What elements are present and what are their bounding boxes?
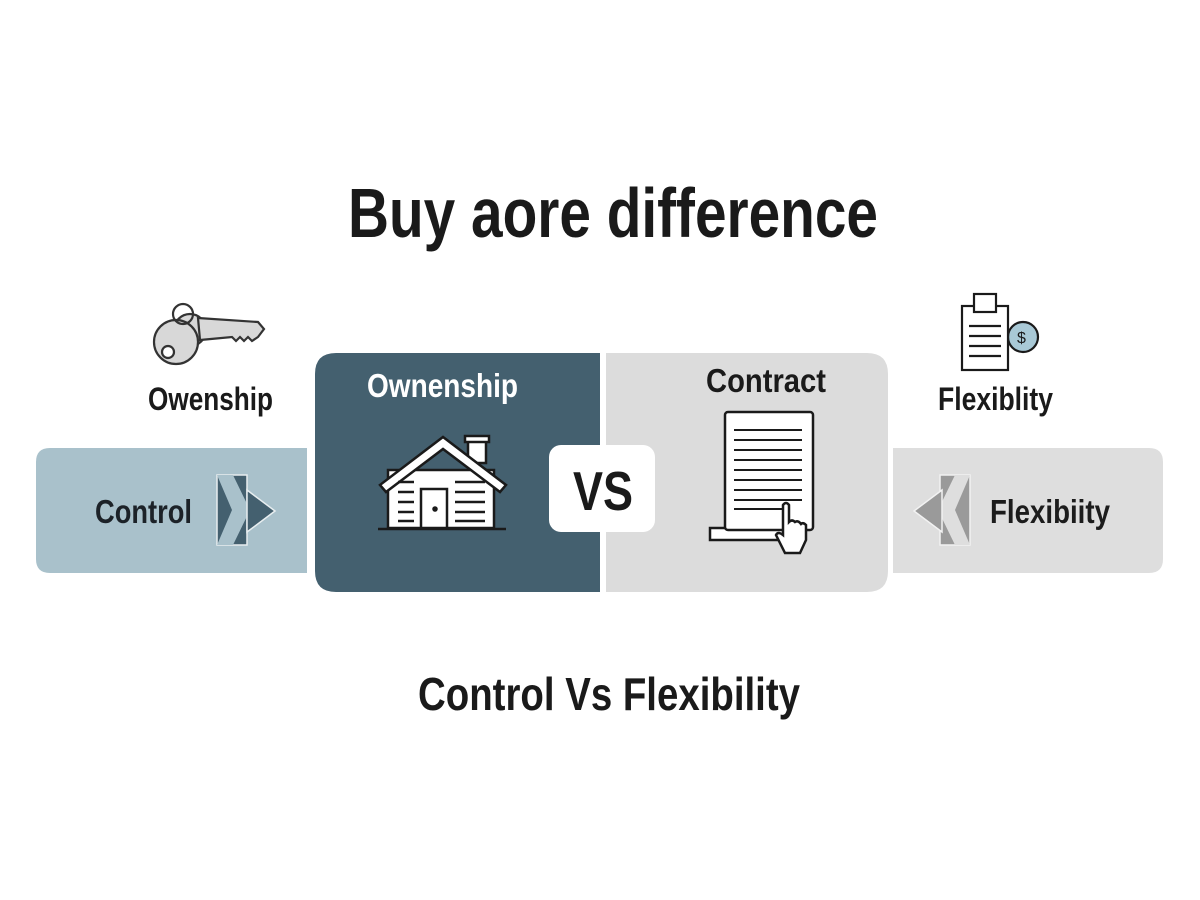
icon: house <box>378 436 506 529</box>
panel: contract (light) <box>606 353 888 592</box>
title: Buy aore difference <box>348 174 878 252</box>
text: Control: Control <box>95 493 192 530</box>
subtitle: Control Vs Flexibility <box>418 668 800 720</box>
heading: Ownenship: Ownenship <box>367 367 518 404</box>
label: Owenship: Owenship <box>148 381 273 417</box>
icon: document with dollar <box>962 294 1038 370</box>
text: Flexibiity: Flexibiity <box>990 493 1111 530</box>
icon: contract document with hand <box>710 412 813 553</box>
text: $ <box>1017 330 1026 347</box>
VS badge <box>549 445 655 532</box>
icon: left chevron arrow <box>914 475 970 545</box>
panel: right flexibility bar <box>893 448 1163 573</box>
label: Flexiblity: Flexiblity <box>938 381 1053 417</box>
VS badge: VS <box>573 460 633 522</box>
icon: right chevron arrow <box>217 475 275 545</box>
icon: keys <box>154 304 264 364</box>
panel: ownership (dark) <box>315 353 600 592</box>
heading: Contract: Contract <box>706 362 826 399</box>
panel: left control bar <box>36 448 307 573</box>
